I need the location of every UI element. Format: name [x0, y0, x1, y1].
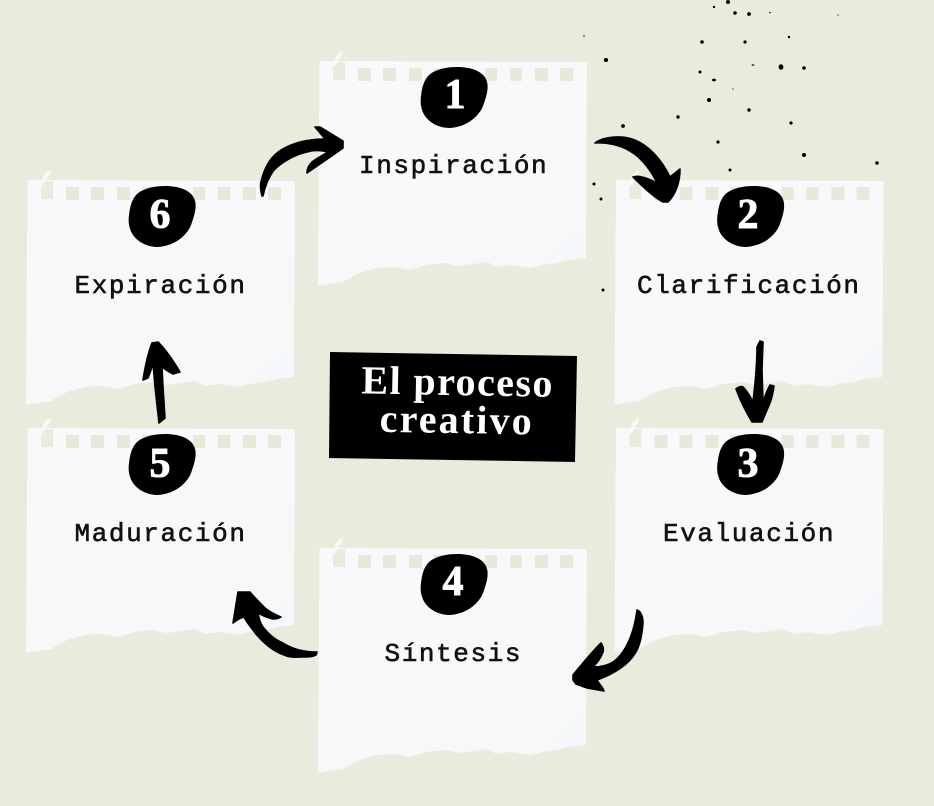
arrow: 1 to 2 — [595, 137, 680, 202]
number badge 1 — [421, 67, 488, 128]
ink speckles — [583, 0, 879, 292]
arrow: 3 to 4 — [573, 610, 643, 691]
label: Evaluación — [663, 519, 835, 549]
number badge 4 — [421, 554, 488, 615]
panel: step 5 Maduración — [26, 418, 295, 653]
label: Inspiración — [359, 151, 548, 181]
number badge 5: 5 — [150, 441, 170, 487]
number badge 2 — [717, 186, 784, 247]
arrow: 2 to 3 — [736, 341, 774, 422]
number badge 6: 6 — [150, 192, 170, 238]
label: Maduración — [74, 519, 247, 549]
title: El proceso creativo — [329, 352, 577, 462]
panel: step 2 Clarificación — [614, 170, 884, 405]
panel: step 3 Evaluación — [614, 418, 884, 653]
title: El proceso creativo: El proceso — [361, 357, 553, 406]
label: Clarificación — [637, 271, 861, 301]
number badge 6 — [129, 186, 196, 247]
label: Expiración — [74, 271, 247, 301]
arrow: 4 to 5 — [233, 592, 317, 657]
number badge 4: 4 — [442, 559, 464, 605]
arrow: 6 to 1 — [260, 127, 343, 196]
panel: step 4 Síntesis — [318, 538, 587, 773]
title: El proceso creativo: creativo — [379, 396, 532, 443]
number badge 2: 2 — [738, 192, 758, 238]
arrow: 5 to 6 — [143, 342, 180, 423]
panel: step 1 Inspiración — [318, 51, 587, 286]
number badge 1: 1 — [444, 72, 466, 118]
panel: step 6 Expiración — [26, 170, 295, 405]
number badge 5 — [129, 434, 196, 495]
number badge 3: 3 — [738, 441, 758, 487]
label: Síntesis — [384, 639, 522, 669]
number badge 3 — [717, 434, 784, 495]
